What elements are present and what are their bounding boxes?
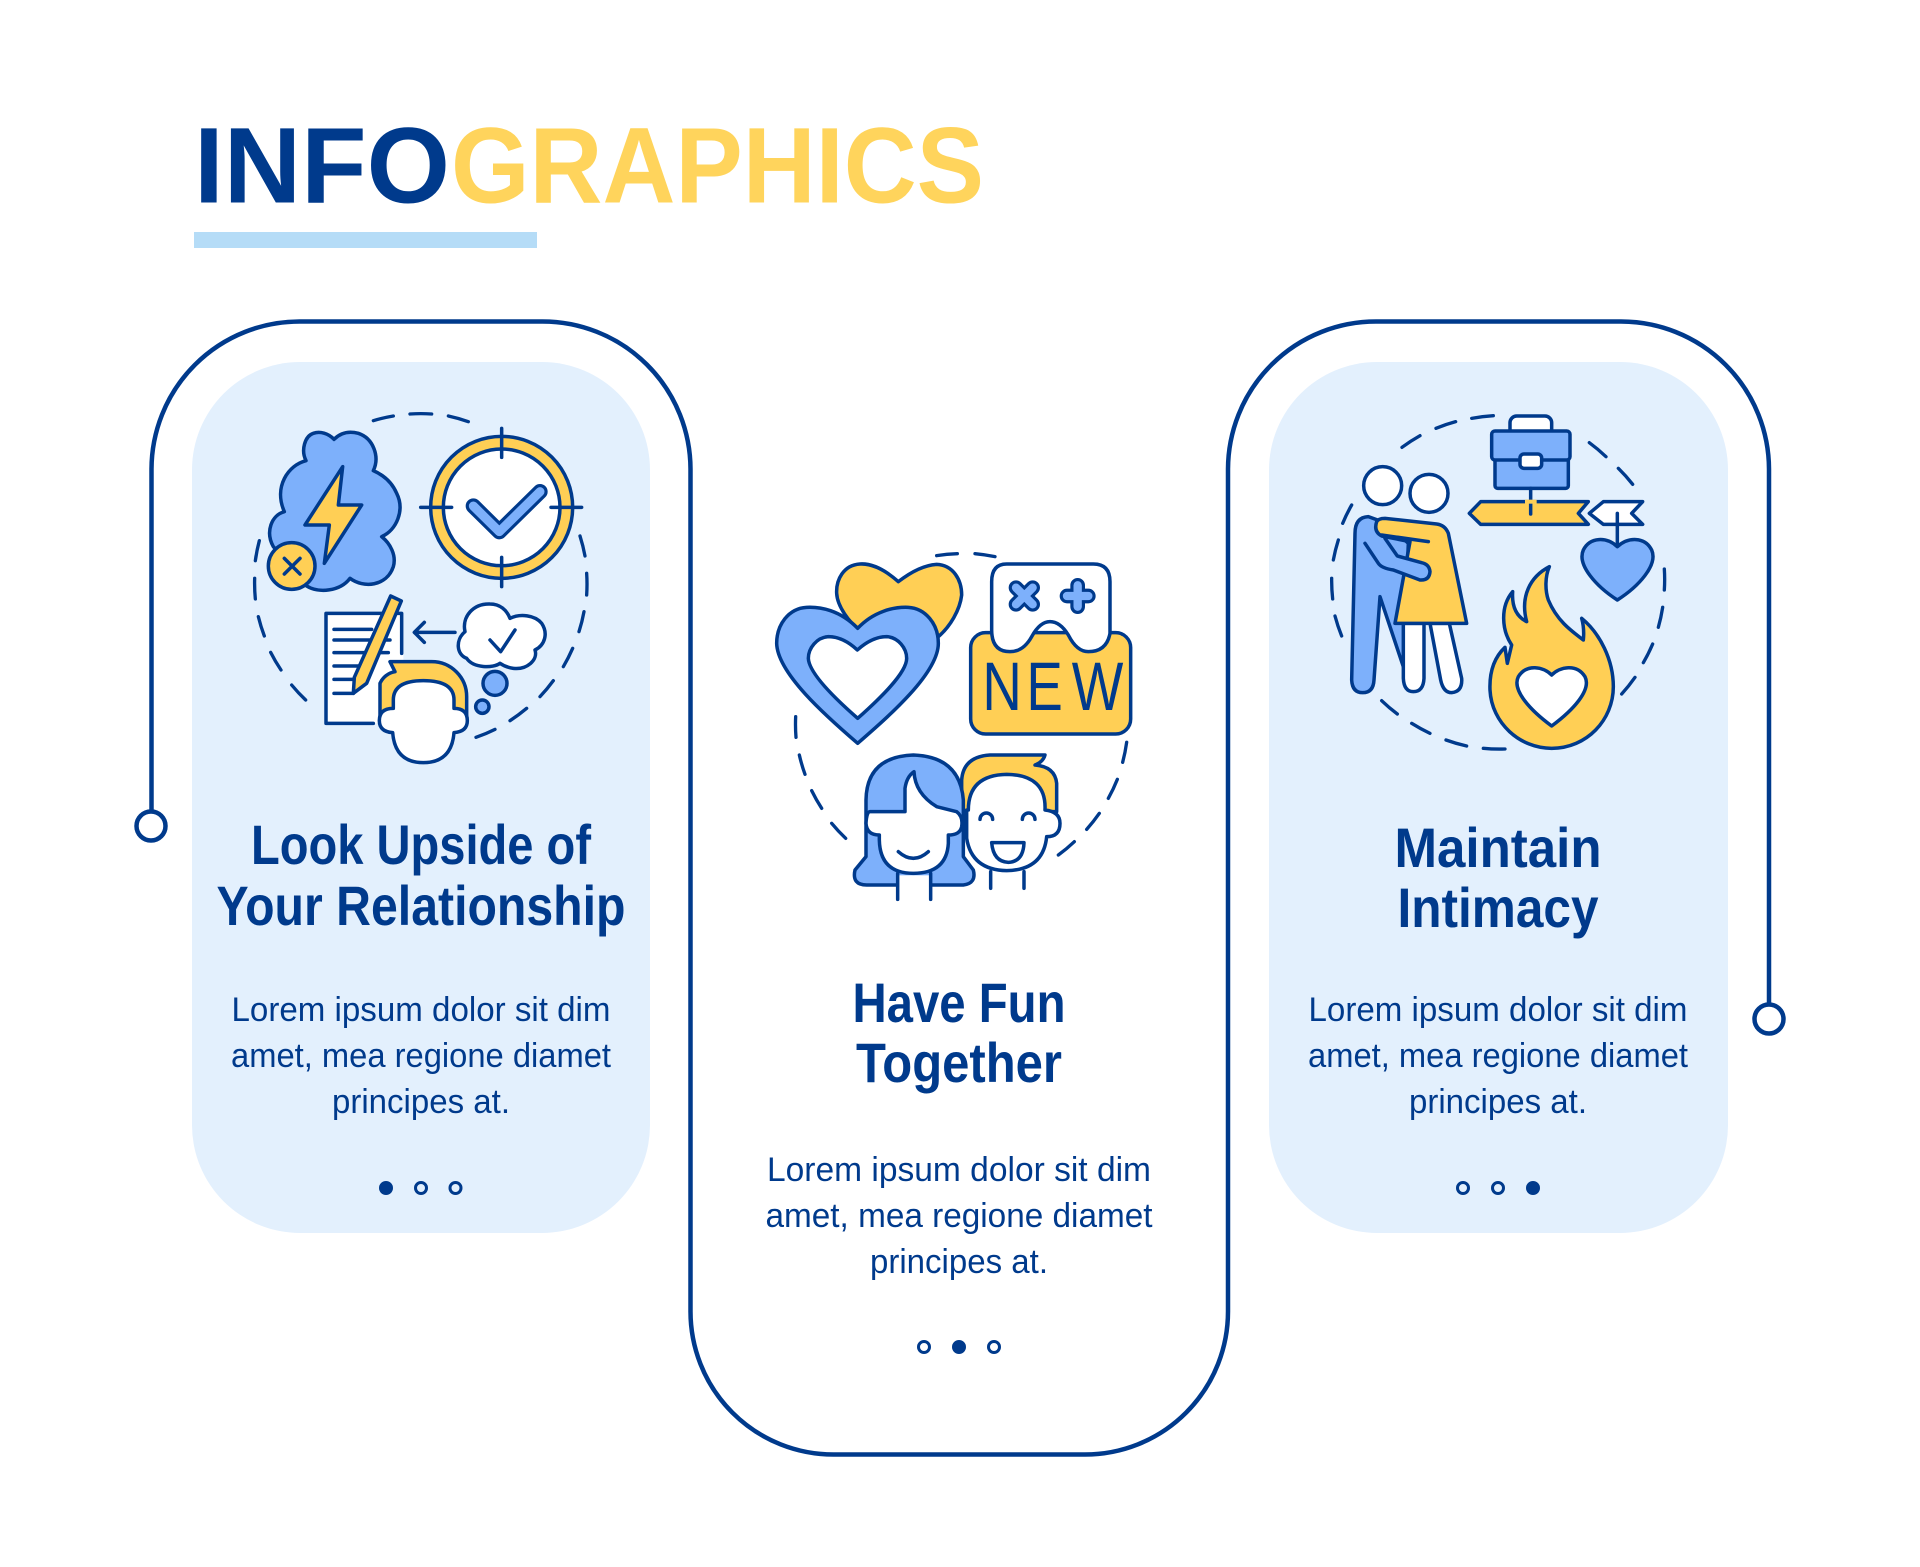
panel: look upside	[192, 362, 650, 1233]
heading: your relationship: Your Relationship	[216, 874, 626, 937]
title: GRAPHICS	[451, 104, 984, 226]
body text: principes at.	[1409, 1083, 1587, 1121]
heading: look upside: Look Upside of	[251, 813, 591, 876]
body text	[766, 1151, 1153, 1281]
heading: maintain: Maintain	[1394, 816, 1602, 879]
connecting outline	[152, 321, 1769, 1454]
body text: principes at.	[870, 1243, 1048, 1281]
panel: maintain intimacy	[1269, 362, 1728, 1233]
badge text: NEW: NEW	[982, 649, 1124, 725]
body text: Lorem ipsum dolor sit dim	[1308, 991, 1688, 1029]
body text: amet, mea regione diamet	[231, 1037, 612, 1075]
icon: hearts, game, couple	[777, 554, 1131, 899]
body text: Lorem ipsum dolor sit dim	[767, 1151, 1151, 1189]
outline end dot	[1754, 1004, 1784, 1034]
pagination dots	[1458, 1182, 1538, 1194]
panel: have fun	[766, 554, 1153, 1352]
body text: amet, mea regione diamet	[766, 1197, 1153, 1235]
title: INFO	[194, 104, 450, 226]
icon: stress, target, notes	[255, 414, 587, 763]
pagination dots	[380, 1182, 461, 1194]
body text: amet, mea regione diamet	[1308, 1037, 1689, 1075]
body text	[1308, 991, 1689, 1121]
heading: intimacy: Intimacy	[1398, 876, 1598, 939]
title	[194, 104, 984, 226]
outline start dot	[136, 812, 166, 840]
title underline	[194, 232, 537, 248]
heading: together: Together	[856, 1031, 1062, 1094]
icon: couple, work-life, flame	[1332, 416, 1665, 749]
body text	[231, 991, 612, 1121]
heading: have fun: Have Fun	[852, 971, 1066, 1034]
body text: Lorem ipsum dolor sit dim	[232, 991, 610, 1029]
body text: principes at.	[332, 1083, 510, 1121]
pagination dots	[918, 1342, 1000, 1352]
